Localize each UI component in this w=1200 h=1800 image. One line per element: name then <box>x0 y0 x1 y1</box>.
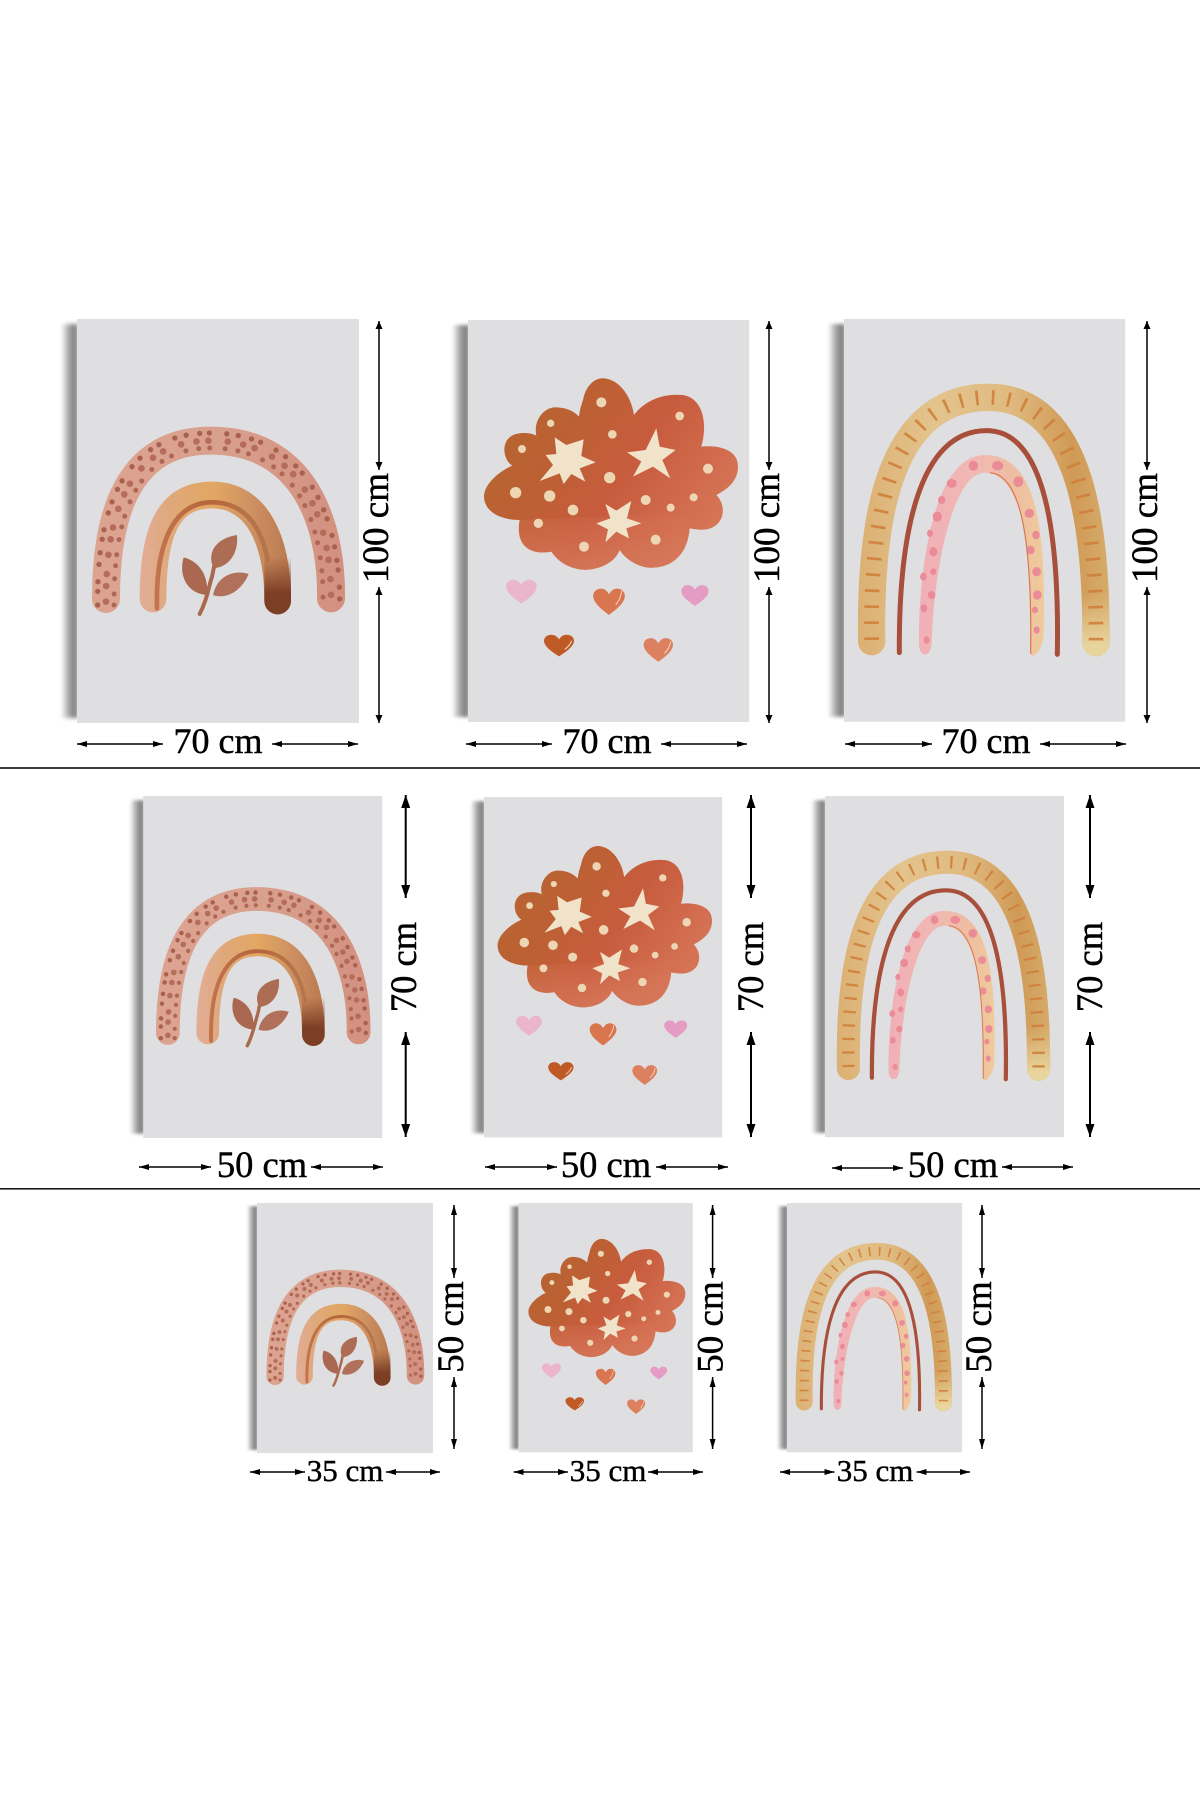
width arrow left <box>466 743 552 745</box>
width label: 70 cm <box>563 721 651 761</box>
dimensions: medium rainbow canvas <box>139 795 424 1185</box>
artwork: sand, maroon and pink arches <box>804 1251 944 1411</box>
height label: 70 cm <box>730 922 771 1012</box>
height arrow top <box>405 795 407 898</box>
artwork: cloud with stars and hearts <box>484 378 738 662</box>
panel: medium cloud canvas <box>470 797 722 1137</box>
height arrow bottom <box>378 587 380 723</box>
height arrow bottom <box>1146 587 1148 723</box>
artwork: cloud with stars and hearts <box>528 1239 685 1414</box>
canvas board <box>509 1203 693 1452</box>
height arrow top <box>378 321 380 470</box>
height label: 100 cm <box>747 473 788 583</box>
panel: large cloud canvas <box>452 320 749 722</box>
width arrow left <box>845 743 932 745</box>
width arrow right <box>311 1166 383 1168</box>
dimensions: small cloud canvas <box>514 1205 732 1488</box>
canvas board <box>130 796 382 1138</box>
width arrow left <box>780 1471 834 1473</box>
height arrow bottom <box>405 1032 407 1137</box>
height arrow top <box>981 1205 983 1278</box>
height label: 50 cm <box>959 1281 1000 1373</box>
divider: row 2 and row 3 <box>0 1188 1200 1190</box>
width label: 70 cm <box>942 721 1030 761</box>
canvas board <box>828 319 1125 722</box>
dimensions: large arch rainbow canvas <box>845 321 1166 761</box>
width label: 35 cm <box>570 1453 646 1488</box>
panel: large rainbow canvas with leaf <box>61 319 359 723</box>
height arrow bottom <box>768 587 770 723</box>
dimensions: large rainbow canvas <box>77 321 397 761</box>
width label: 50 cm <box>561 1144 651 1185</box>
height arrow top <box>750 795 752 898</box>
dimensions: medium arch rainbow canvas <box>832 795 1110 1185</box>
panel: medium rainbow canvas with leaf <box>130 796 382 1138</box>
panel: large arch rainbow canvas <box>828 319 1125 722</box>
width arrow right <box>661 743 747 745</box>
width label: 50 cm <box>217 1144 307 1185</box>
height label: 50 cm <box>690 1281 732 1373</box>
width arrow left <box>485 1166 557 1168</box>
width arrow right <box>656 1166 728 1168</box>
height label: 100 cm <box>356 473 397 583</box>
canvas board <box>452 320 749 722</box>
height arrow top <box>768 321 770 470</box>
width label: 35 cm <box>307 1453 383 1488</box>
height arrow top <box>1146 321 1148 470</box>
width arrow right <box>272 743 358 745</box>
width arrow left <box>514 1471 568 1473</box>
width arrow right <box>917 1471 970 1473</box>
panel: small cloud canvas <box>509 1203 693 1452</box>
dimensions: small arch rainbow canvas <box>780 1205 1000 1488</box>
canvas board <box>61 319 359 723</box>
height arrow bottom <box>981 1377 983 1449</box>
width label: 35 cm <box>837 1453 913 1488</box>
height arrow top <box>712 1205 714 1278</box>
panel: small arch rainbow canvas <box>777 1203 962 1452</box>
width arrow right <box>648 1471 703 1473</box>
canvas board <box>811 796 1064 1137</box>
height label: 100 cm <box>1125 473 1166 583</box>
width arrow left <box>77 743 163 745</box>
width label: 70 cm <box>174 721 262 761</box>
width arrow right <box>1002 1166 1073 1168</box>
panel: small rainbow canvas with leaf <box>247 1203 433 1453</box>
canvas board <box>470 797 722 1137</box>
height arrow bottom <box>750 1032 752 1137</box>
width arrow left <box>139 1166 211 1168</box>
height arrow bottom <box>453 1377 455 1449</box>
dimensions: small rainbow canvas <box>250 1205 472 1488</box>
width arrow right <box>386 1471 440 1473</box>
height arrow bottom <box>712 1377 714 1449</box>
canvas board <box>247 1203 433 1453</box>
width arrow left <box>832 1167 903 1169</box>
artwork: cloud with stars and hearts <box>498 846 712 1085</box>
width arrow left <box>250 1471 305 1473</box>
height arrow bottom <box>1089 1032 1091 1137</box>
divider: row 1 and row 2 <box>0 767 1200 769</box>
height label: 70 cm <box>383 922 424 1012</box>
artwork: sand, maroon and pink arches <box>848 862 1039 1081</box>
height label: 50 cm <box>431 1281 472 1373</box>
artwork: spotted rainbow with leaf <box>270 1274 421 1386</box>
artwork: spotted rainbow with leaf <box>98 433 340 614</box>
height label: 70 cm <box>1069 922 1110 1012</box>
panel: medium arch rainbow canvas <box>811 796 1064 1137</box>
artwork: sand, maroon and pink arches <box>872 397 1096 656</box>
dimensions: medium cloud canvas <box>485 795 771 1185</box>
artwork: spotted rainbow with leaf <box>161 893 366 1046</box>
height arrow top <box>453 1205 455 1278</box>
width label: 50 cm <box>908 1144 998 1185</box>
canvas board <box>777 1203 962 1452</box>
height arrow top <box>1089 795 1091 898</box>
dimensions: large cloud canvas <box>466 321 788 761</box>
width arrow right <box>1040 743 1126 745</box>
